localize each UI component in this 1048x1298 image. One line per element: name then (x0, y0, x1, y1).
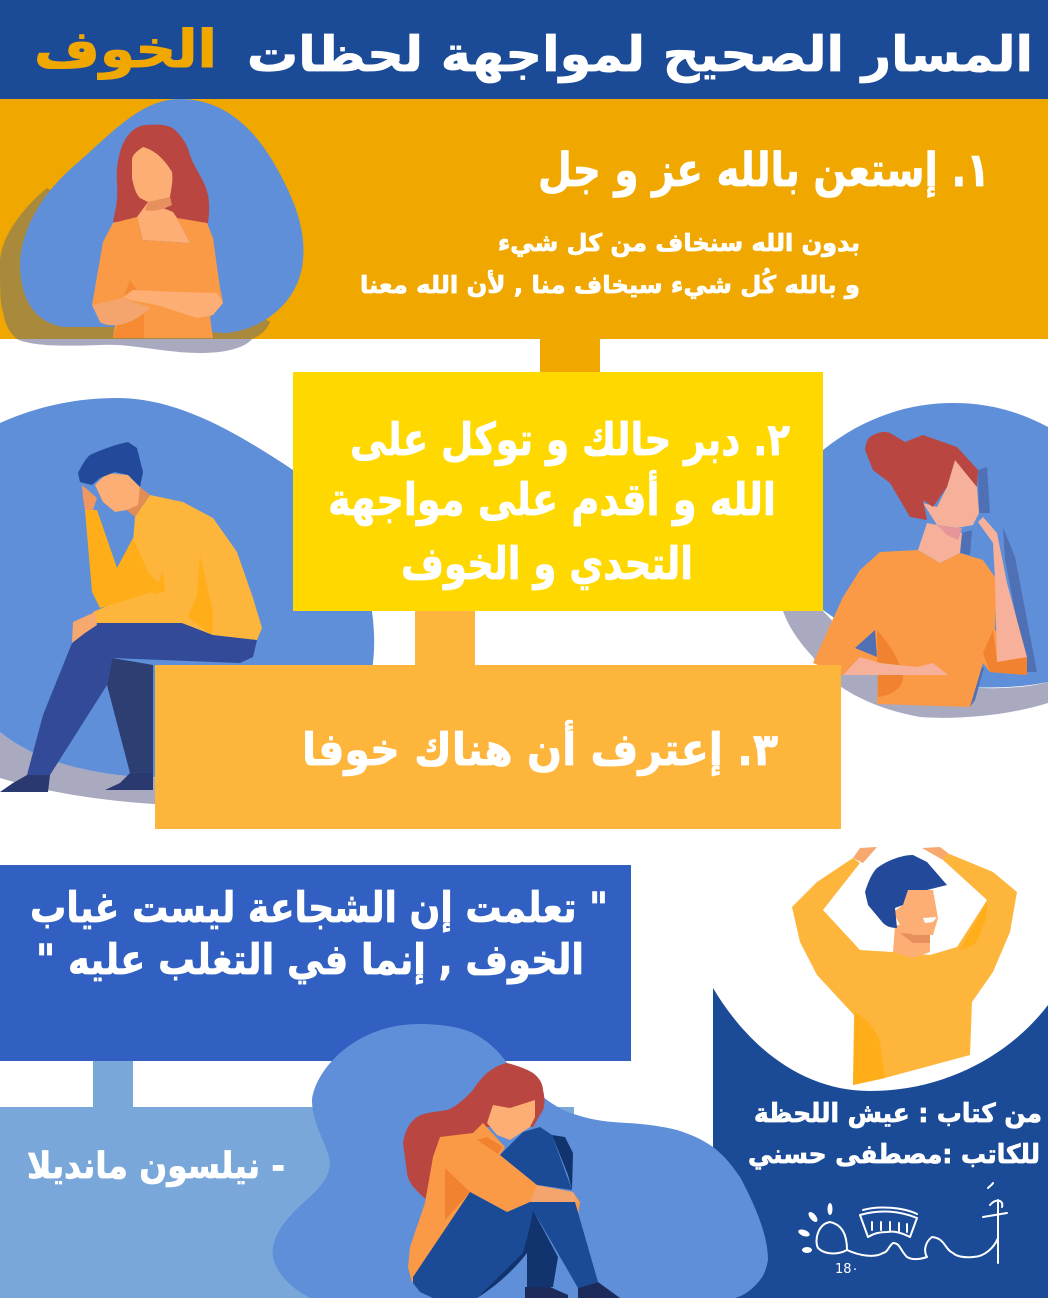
book credit text (748, 1099, 1042, 1170)
figure: woman thinking (783, 403, 1048, 718)
logo number: 18٠ (835, 1262, 859, 1277)
connector: step 2 to step 3 (415, 611, 475, 666)
panel: step 3 (155, 665, 841, 829)
title highlight word: الخوف (34, 20, 217, 80)
step 1 heading: ١. إستعن بالله عز و جل (538, 143, 990, 198)
attribution text: - نيلسون مانديلا (27, 1146, 285, 1187)
quote line 1: " تعلمت إن الشجاعة ليست غياب (30, 883, 608, 933)
logo sun rays (797, 1203, 832, 1253)
logo script strokes (816, 1183, 1007, 1263)
step 1 body line 2: و بالله كُل شيء سيخاف منا , لأن الله معنا (360, 268, 860, 299)
panel: step 1 (0, 99, 1048, 353)
panel: quote (0, 865, 631, 1061)
panel: attribution (0, 1107, 574, 1298)
panel: book credit background (713, 988, 1048, 1298)
figure: woman with crossed arms (0, 99, 303, 353)
step 3 text: ٣. إعترف أن هناك خوفا (302, 720, 778, 776)
title text: المسار الصحيح لمواجهة لحظات (247, 26, 1033, 83)
step 1 body line 1: بدون الله سنخاف من كل شيء (498, 229, 860, 257)
step 2 line 3: التحدي و الخوف (401, 537, 693, 590)
figure: sitting man (0, 398, 374, 804)
step 2 line 1: ٢. دبر حالك و توكل على (350, 413, 790, 466)
book credit line 2: للكاتب :مصطفى حسني (748, 1140, 1040, 1170)
connector: quote to attribution (93, 1061, 133, 1107)
publisher logo (797, 1183, 1007, 1277)
figure: woman hugging knees (273, 1024, 768, 1298)
figure: man with hands on head (792, 847, 1017, 1085)
title banner (0, 0, 1048, 99)
quote line 2: الخوف , إنما في التغلب عليه " (36, 935, 584, 985)
panel: step 2 (293, 372, 823, 611)
step 2 line 2: الله و أقدم على مواجهة (328, 470, 776, 526)
connector: step 1 to step 2 (540, 339, 600, 372)
book credit line 1: من كتاب : عيش اللحظة (754, 1099, 1042, 1129)
